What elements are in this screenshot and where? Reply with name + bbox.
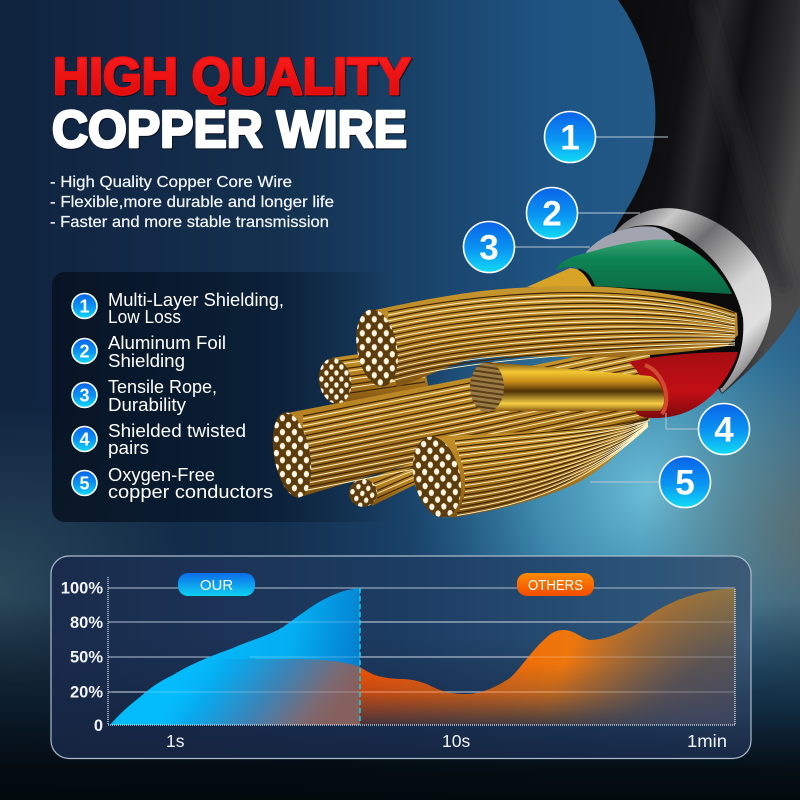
x axis labels: 1s (166, 731, 185, 751)
callout 1: 1 (560, 118, 580, 158)
legend item 3: 3 (79, 386, 90, 406)
y axis labels: 50% (70, 648, 103, 666)
wire end: left (267, 410, 317, 500)
lower copper bundle (406, 417, 648, 522)
y axis labels: 20% (70, 684, 103, 702)
legend item 2: Shielding (108, 351, 185, 371)
x axis labels (166, 731, 727, 751)
legend item 5: 5 (79, 474, 90, 494)
left copper bundle (267, 342, 650, 500)
feature bullets: - Faster and more stable transmission (50, 214, 329, 231)
title (52, 48, 411, 159)
wire end: top (351, 306, 403, 390)
green insulated wire (556, 240, 732, 294)
callout 4: 4 (714, 410, 734, 450)
legend item 4: 4 (79, 430, 90, 450)
y axis labels: 0 (94, 717, 103, 735)
grid lines (108, 588, 735, 692)
pill: OTHERS: OTHERS (528, 577, 583, 594)
legend item 3 (72, 377, 217, 415)
small back bundle (315, 345, 430, 406)
panel: transmission speed chart (51, 556, 751, 758)
blended lower blue area (130, 659, 360, 725)
grey foil (586, 226, 675, 262)
gold wire inside green sleeve (527, 268, 592, 287)
top copper bundle (351, 286, 738, 390)
callout badges (464, 112, 750, 508)
black ring interior (560, 225, 743, 400)
legend item 3: Tensile Rope, (108, 377, 217, 397)
feature bullets: - Flexible,more durable and longer life (50, 194, 334, 211)
legend item 2: Aluminum Foil (108, 333, 226, 353)
x axis labels: 10s (442, 731, 470, 751)
axes dotted (108, 577, 735, 725)
cable illustration (267, 0, 800, 522)
panel: legend of cable layers (52, 272, 392, 522)
pill: OUR: OUR (200, 577, 233, 594)
pill: OTHERS (517, 573, 594, 596)
y axis labels: 80% (70, 614, 103, 632)
blue area: our (110, 588, 360, 725)
feature bullets: - High Quality Copper Core Wire (50, 174, 292, 191)
black outer jacket (610, 0, 800, 394)
small lower bundle (349, 462, 420, 507)
wire end: lower (406, 432, 468, 522)
callout 3: 3 (479, 228, 499, 268)
legend item 1 (72, 290, 284, 327)
pill: OUR (178, 573, 255, 596)
divider at 1s boundary (359, 588, 361, 725)
wire end: small lower (349, 479, 377, 507)
callout 1 (544, 112, 668, 162)
legend item 1: Low Loss (108, 307, 181, 327)
legend item 4: Shielded twisted (108, 421, 246, 441)
wire end: small back (315, 356, 355, 406)
callout 3 (464, 222, 590, 272)
gold conductor (470, 362, 664, 412)
y axis labels (61, 580, 103, 735)
legend item 1: 1 (79, 296, 90, 316)
x axis labels: 1min (687, 731, 727, 751)
legend item 3: Durability (108, 395, 186, 415)
callout 4 (666, 404, 750, 454)
legend item 2: 2 (79, 342, 90, 362)
title line: COPPER WIRE: COPPER WIRE (52, 101, 407, 159)
y axis labels: 100% (61, 580, 103, 598)
title line: HIGH QUALITY: HIGH QUALITY (53, 48, 411, 106)
legend item 1: Multi-Layer Shielding, (108, 290, 284, 310)
silver shielding ring (612, 208, 771, 393)
legend item 2 (72, 333, 226, 371)
callout 2 (526, 188, 640, 238)
faint grid over areas (112, 622, 735, 692)
callout 5: 5 (675, 464, 695, 502)
callout 5 (590, 456, 710, 508)
legend item 4: pairs (108, 438, 149, 458)
legend item 4 (72, 421, 246, 458)
callout 2: 2 (542, 194, 562, 234)
conductor cut face (470, 362, 504, 412)
legend item 5: copper conductors (108, 482, 273, 502)
feature bullets (50, 174, 334, 231)
red insulated wire (628, 352, 738, 418)
orange area: others (360, 588, 735, 725)
legend item 5 (72, 465, 273, 502)
legend item 5: Oxygen-Free (108, 465, 215, 485)
